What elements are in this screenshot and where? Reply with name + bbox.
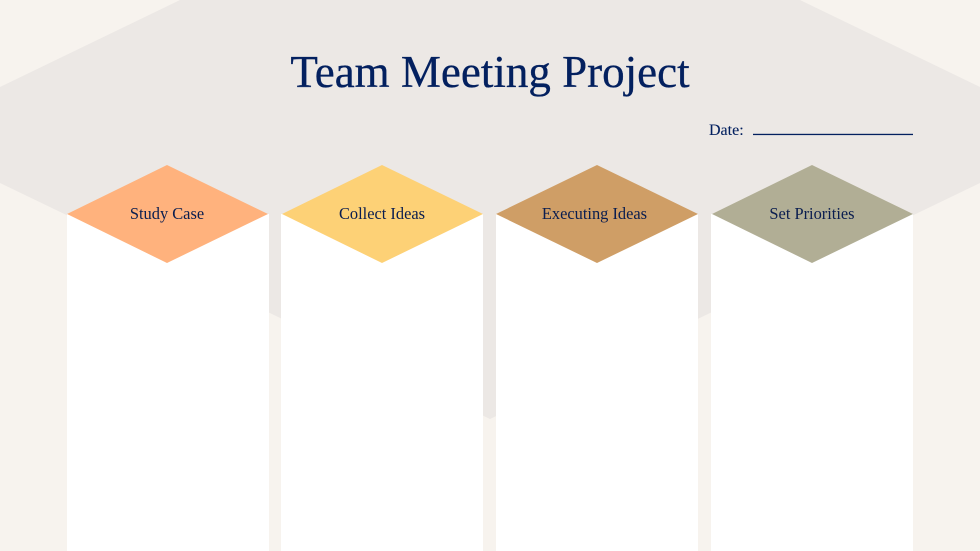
column: Study Case	[67, 165, 269, 551]
column: Set Priorities: Set Priorities	[769, 204, 855, 223]
column: Collect Ideas	[281, 165, 483, 551]
title: Team Meeting Project	[290, 47, 690, 97]
column: Set Priorities	[711, 165, 913, 551]
background hexagon	[0, 0, 980, 419]
column: Study Case: Study Case	[130, 204, 204, 223]
column: Executing Ideas	[496, 165, 698, 551]
column: Collect Ideas: Collect Ideas	[339, 204, 425, 223]
column: Executing Ideas: Executing Ideas	[542, 204, 647, 223]
date field: Date:	[709, 122, 744, 139]
